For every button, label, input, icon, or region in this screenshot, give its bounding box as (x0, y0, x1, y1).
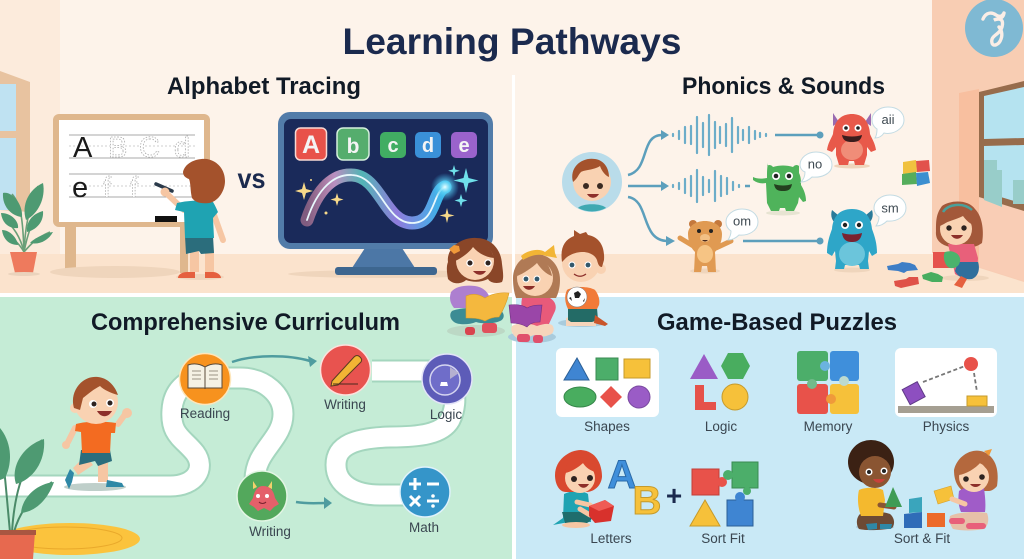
letter tiles (296, 128, 477, 160)
bear character (680, 220, 731, 274)
node: writing: Writing (324, 397, 366, 412)
puzzle: physics (895, 348, 997, 434)
speech bubble: no: no (808, 156, 822, 172)
heading: comprehensive curriculum: Comprehensive Curriculum (91, 309, 400, 336)
whiteboard (50, 114, 210, 278)
sound wave 2 (673, 170, 739, 202)
two children with blocks (848, 440, 998, 530)
whiteboard: e (72, 172, 88, 204)
whiteboard: f (130, 172, 139, 204)
running boy (62, 377, 132, 491)
label: sort and fit: Sort & Fit (894, 531, 950, 546)
node: writing (320, 345, 370, 412)
node: logic (422, 354, 472, 422)
child avatar (562, 152, 622, 212)
panel: game-based puzzles background (516, 297, 1024, 559)
speech bubble: sm: sm (881, 200, 899, 216)
letters A and B: A (608, 453, 636, 497)
yellow rug (0, 523, 140, 555)
girl with purple book (508, 245, 560, 343)
computer monitor (278, 112, 493, 278)
speech bubble: om (726, 209, 758, 240)
letter tiles: d (422, 135, 434, 157)
girl with letter blocks (553, 450, 614, 528)
boy tracing at whiteboard (156, 159, 225, 280)
logo (965, 0, 1023, 57)
right window (979, 81, 1024, 211)
vs label: vs (238, 163, 266, 194)
connector lines (743, 132, 824, 244)
node: math (400, 467, 450, 535)
whiteboard: B (108, 132, 127, 164)
letters A and B: B (633, 479, 661, 523)
letters A and B (608, 453, 661, 523)
whiteboard: f (103, 172, 112, 204)
speech bubble: sm (874, 195, 906, 226)
letter tiles: c (387, 135, 399, 157)
speech bubble: no (800, 152, 832, 182)
wall puzzle icon (902, 160, 930, 186)
boy with soccer ball (558, 230, 608, 327)
green monster (753, 163, 806, 216)
puzzle: memory (797, 351, 859, 434)
glowing trace wave (307, 173, 459, 223)
blue monster (827, 209, 877, 272)
letter tiles: e (458, 135, 470, 157)
puzzle: physics: Physics (923, 419, 970, 434)
plant: top left (1, 183, 53, 276)
plus sign: + (666, 480, 682, 511)
node: logic: Logic (430, 407, 462, 422)
label: sort fit: Sort Fit (701, 531, 745, 546)
girl with yellow book (447, 238, 509, 337)
node: writing monster (237, 471, 291, 539)
puzzle: logic (690, 353, 750, 434)
teal arrows (232, 356, 332, 509)
red monster (827, 113, 876, 168)
heading: alphabet tracing: Alphabet Tracing (167, 73, 361, 100)
node: reading: Reading (180, 406, 230, 421)
heading: game-based puzzles: Game-Based Puzzles (657, 309, 897, 336)
puzzle: shapes (556, 348, 659, 434)
floor puzzle pieces (887, 262, 943, 288)
sort fit shapes (690, 462, 758, 526)
whiteboard: A (73, 132, 93, 164)
girl with puzzle pieces (933, 201, 989, 288)
speech bubble: aii: aii (881, 112, 895, 127)
letter tiles: A (302, 131, 320, 159)
branching arrows (628, 130, 675, 246)
top room background (0, 0, 1024, 297)
label: letters: Letters (590, 531, 632, 546)
speech bubble: om: om (733, 214, 751, 228)
panel: comprehensive curriculum background (0, 297, 512, 559)
winding path (0, 371, 455, 498)
puzzle: memory: Memory (804, 419, 853, 434)
center reading children (447, 230, 608, 343)
node: writing monster: Writing (249, 524, 291, 539)
puzzle: logic: Logic (705, 419, 737, 434)
title: Learning Pathways (342, 21, 682, 62)
node: reading (180, 354, 230, 421)
whiteboard: d (174, 132, 190, 164)
sparkles (295, 179, 454, 223)
node: math: Math (409, 520, 439, 535)
whiteboard: C (139, 132, 160, 164)
heading: phonics and sounds: Phonics & Sounds (682, 73, 885, 100)
puzzle: shapes: Shapes (584, 419, 630, 434)
left window (0, 71, 30, 212)
plant: bottom left (0, 428, 54, 559)
speech bubble: aii (872, 107, 904, 138)
sound wave 1 (673, 115, 766, 155)
letter tiles: b (347, 135, 359, 158)
